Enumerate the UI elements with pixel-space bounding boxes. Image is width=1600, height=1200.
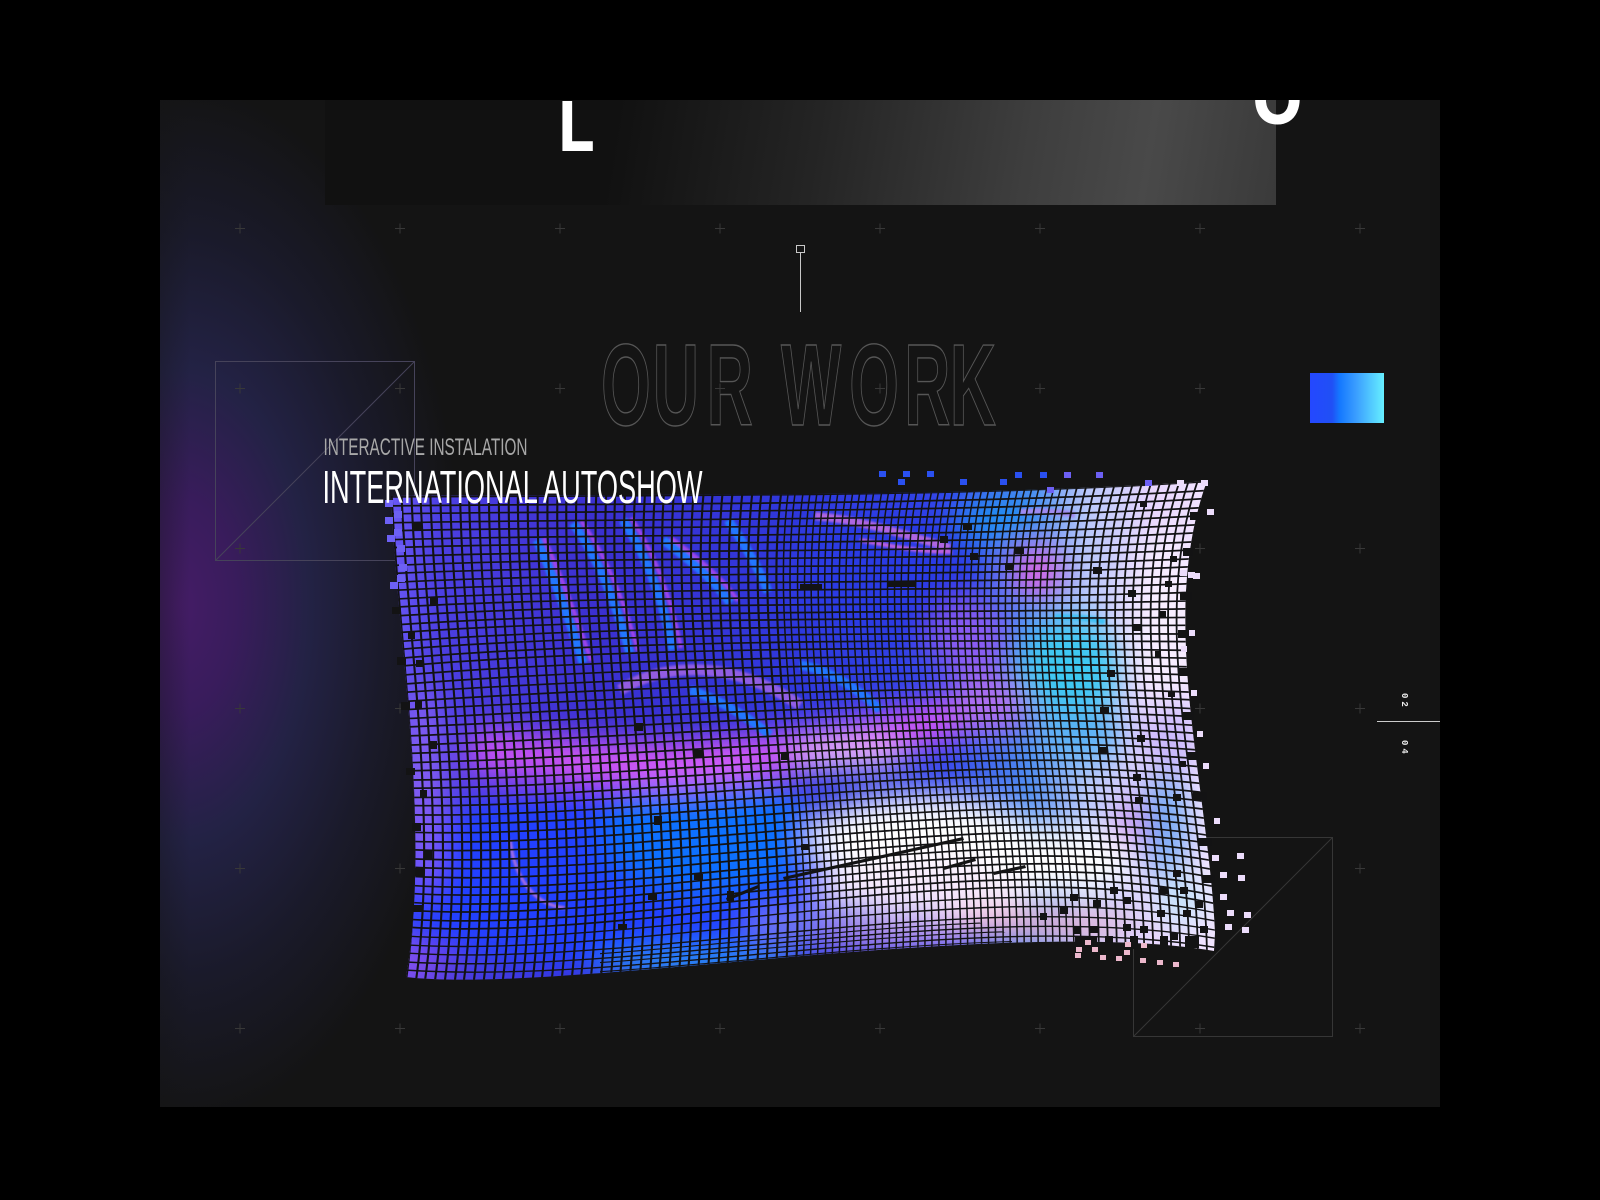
project title: INTERNATIONAL AUTOSHOW xyxy=(322,461,703,513)
infographic canvas xyxy=(160,100,1440,1107)
outlined heading: our work: OUR WORK xyxy=(601,320,996,450)
right decorative square with diagonal xyxy=(1134,838,1332,1036)
grid of plus marks xyxy=(235,224,1365,1034)
clipped hero letters xyxy=(562,100,1300,151)
project captions xyxy=(322,434,703,513)
mesh streaks xyxy=(510,511,1105,908)
top hero image strip xyxy=(325,100,1300,205)
mesh row lines xyxy=(380,480,1230,981)
loose particles: blue xyxy=(879,471,1047,485)
gradient colour swatch xyxy=(1310,373,1384,423)
left decorative square with diagonal xyxy=(216,362,414,560)
particle cloth mesh xyxy=(370,470,1251,1000)
connector marker and vertical line xyxy=(796,246,804,312)
panel background xyxy=(160,100,1440,1107)
compressed rows near the lower fold xyxy=(600,922,1012,972)
loose particles: pale xyxy=(1177,480,1251,933)
project category: INTERACTIVE INSTALATION xyxy=(324,434,528,461)
clipped hero letters: O xyxy=(1254,59,1301,138)
mesh colour field xyxy=(391,481,1215,980)
mesh column lines xyxy=(391,480,1207,1000)
page indicator 02 / 04: 04 xyxy=(1399,740,1409,757)
loose particles: pink xyxy=(1075,940,1179,967)
mesh holes and tears xyxy=(392,501,1215,949)
page indicator 02 / 04: 02 xyxy=(1399,693,1409,710)
clipped hero letters: L xyxy=(560,88,594,165)
page indicator 02 / 04 xyxy=(1377,693,1440,757)
loose particles: violet xyxy=(385,472,1152,589)
